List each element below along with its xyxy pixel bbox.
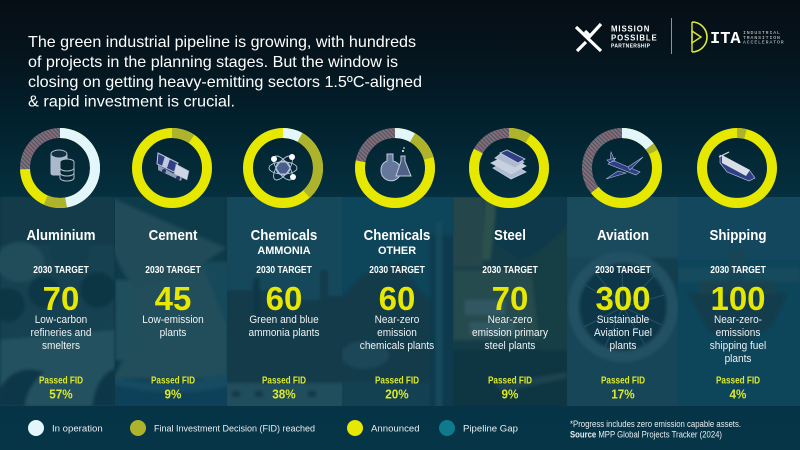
panel: shipping: shipping fuel bbox=[710, 341, 766, 352]
ring: shipping bbox=[702, 133, 772, 203]
legend item: announced bbox=[347, 420, 420, 436]
legend item: FID reached: Final Investment Decision (FID) reached bbox=[154, 424, 315, 434]
panel: chemicals other bbox=[360, 133, 434, 402]
panel: aluminium: Low-carbon bbox=[35, 315, 88, 326]
panel: chemicals other: Near-zero bbox=[375, 315, 420, 326]
panel: chemicals ammonia: 2030 TARGET bbox=[256, 264, 312, 275]
legend item: announced: Announced bbox=[371, 424, 420, 434]
panel: aviation: plants bbox=[610, 341, 636, 352]
legend item: in operation: In operation bbox=[52, 424, 103, 434]
panel: chemicals ammonia bbox=[248, 133, 320, 402]
panel: aviation: 300 bbox=[595, 280, 651, 317]
ring: chemicals ammonia bbox=[248, 133, 318, 203]
panel: steel: 9% bbox=[502, 387, 518, 402]
headline: of projects in the planning stages. But the window is bbox=[28, 54, 398, 71]
panel: shipping: Near-zero- bbox=[714, 315, 762, 326]
title: chemicals ammonia: Chemicals bbox=[251, 226, 318, 243]
panel: chemicals ammonia: Green and blue bbox=[249, 315, 319, 326]
title: steel: Steel bbox=[494, 226, 526, 243]
legend item: pipeline gap bbox=[439, 420, 518, 436]
logo: Mission Possible Partnership: POSSIBLE bbox=[611, 34, 658, 43]
panel: shipping bbox=[702, 133, 772, 402]
headline: & rapid investment is crucial. bbox=[28, 94, 235, 110]
panel: aluminium: 2030 TARGET bbox=[33, 264, 89, 275]
panel: shipping: Passed FID bbox=[716, 375, 760, 386]
photo strip: cement bbox=[112, 190, 230, 410]
photo strip: shipping bbox=[675, 190, 800, 410]
panel: aluminium: refineries and bbox=[31, 328, 92, 339]
logo divider bbox=[671, 18, 672, 54]
panel: steel: steel plants bbox=[485, 341, 535, 352]
ring: steel bbox=[474, 133, 544, 203]
icon: steel beams bbox=[491, 150, 526, 179]
panel: aviation: 17% bbox=[611, 387, 635, 402]
title: cement: Cement bbox=[149, 226, 198, 243]
icon: cement mixer truck bbox=[157, 153, 189, 181]
panel: steel: emission primary bbox=[472, 328, 549, 339]
photo strip: aviation bbox=[565, 190, 680, 410]
panel: aviation: 2030 TARGET bbox=[595, 264, 651, 275]
ring: aviation bbox=[587, 133, 657, 203]
panel: aluminium: 57% bbox=[49, 387, 73, 402]
legend bbox=[28, 420, 518, 436]
panel: cement: 9% bbox=[165, 387, 181, 402]
panel: aviation: Aviation Fuel bbox=[594, 328, 652, 339]
headline: closing on getting heavy-emitting sectors 1.5ºC-aligned bbox=[28, 74, 422, 91]
footnote: Source MPP Global Projects Tracker (2024) bbox=[570, 430, 722, 440]
panel: chemicals other: 20% bbox=[385, 387, 409, 402]
panel: chemicals ammonia: AMMONIA bbox=[257, 245, 311, 257]
logo: Mission Possible Partnership: PARTNERSHIP bbox=[611, 44, 651, 50]
footnote: *Progress includes zero emission capable assets. bbox=[570, 419, 741, 429]
title: aviation: Aviation bbox=[597, 226, 649, 243]
icon: aluminium cans bbox=[51, 150, 74, 181]
photo strip: aluminium bbox=[0, 190, 116, 410]
photo strip: chemicals ammonia bbox=[225, 190, 345, 410]
ring: chemicals other bbox=[360, 133, 430, 203]
panel: chemicals other: OTHER bbox=[378, 245, 416, 257]
panel: aviation bbox=[587, 133, 657, 402]
logo: Industrial Transition Accelerator bbox=[692, 22, 785, 52]
panel: chemicals other: Passed FID bbox=[375, 375, 419, 386]
panel: chemicals other: chemicals plants bbox=[360, 341, 434, 352]
logo: Mission Possible Partnership bbox=[576, 24, 658, 51]
panel: cement: 45 bbox=[155, 280, 191, 317]
title: aluminium: Aluminium bbox=[27, 226, 95, 243]
panel: shipping: 4% bbox=[730, 387, 746, 402]
panel: aluminium: smelters bbox=[42, 341, 80, 352]
logo: Industrial Transition Accelerator: ACCELERATOR bbox=[743, 40, 785, 46]
logo: Industrial Transition Accelerator: ITA bbox=[710, 30, 741, 49]
ring: cement bbox=[137, 133, 207, 203]
panel: aviation: Sustainable bbox=[597, 315, 650, 326]
logo: Industrial Transition Accelerator: TRANSITION bbox=[743, 35, 781, 41]
legend item: FID reached bbox=[130, 420, 315, 436]
panel: chemicals other: 60 bbox=[379, 280, 415, 317]
panel: shipping: emissions bbox=[716, 328, 760, 339]
photo strip tint bbox=[0, 197, 800, 406]
legend item: in operation bbox=[28, 420, 103, 436]
logo: Industrial Transition Accelerator: INDUSTRIAL bbox=[743, 30, 781, 36]
panel: cement: Passed FID bbox=[151, 375, 195, 386]
panel: steel: Near-zero bbox=[488, 315, 533, 326]
footnote bbox=[570, 419, 741, 440]
icon: flasks bbox=[381, 147, 411, 181]
icon: atom bbox=[269, 153, 297, 183]
photo strip: chemicals other bbox=[340, 190, 455, 410]
legend item: pipeline gap: Pipeline Gap bbox=[463, 424, 518, 434]
photo strip: steel bbox=[453, 197, 567, 394]
panel: aviation: Passed FID bbox=[601, 375, 645, 386]
panel: steel: 2030 TARGET bbox=[482, 264, 538, 275]
headline: The green industrial pipeline is growing, with hundreds bbox=[28, 34, 416, 51]
panel: shipping: 100 bbox=[710, 280, 766, 317]
panel: cement: 2030 TARGET bbox=[145, 264, 201, 275]
panel: chemicals ammonia: 38% bbox=[272, 387, 296, 402]
logo: Mission Possible Partnership: MISSION bbox=[611, 25, 650, 34]
panel: aluminium: 70 bbox=[43, 280, 79, 317]
panel: aluminium bbox=[25, 133, 95, 402]
panel: steel bbox=[472, 133, 549, 402]
panel: steel: 70 bbox=[492, 280, 528, 317]
panel: chemicals ammonia: ammonia plants bbox=[248, 328, 320, 339]
panel: chemicals ammonia: Passed FID bbox=[262, 375, 306, 386]
panel: chemicals other: emission bbox=[377, 328, 417, 339]
panel: shipping: plants bbox=[725, 354, 751, 365]
title: shipping: Shipping bbox=[709, 226, 767, 243]
icon: airplane bbox=[606, 152, 643, 179]
panel: chemicals other: 2030 TARGET bbox=[369, 264, 425, 275]
panel: cement: Low-emission bbox=[142, 315, 204, 326]
icon: ship bbox=[719, 152, 755, 181]
panel: shipping: 2030 TARGET bbox=[710, 264, 766, 275]
ring: aluminium bbox=[25, 133, 95, 203]
headline bbox=[28, 34, 422, 110]
panel: cement bbox=[137, 133, 207, 402]
title: chemicals other: Chemicals bbox=[364, 226, 431, 243]
panel: chemicals ammonia: 60 bbox=[266, 280, 302, 317]
panel: aluminium: Passed FID bbox=[39, 375, 83, 386]
panel: steel: Passed FID bbox=[488, 375, 532, 386]
panel: cement: plants bbox=[160, 328, 186, 339]
